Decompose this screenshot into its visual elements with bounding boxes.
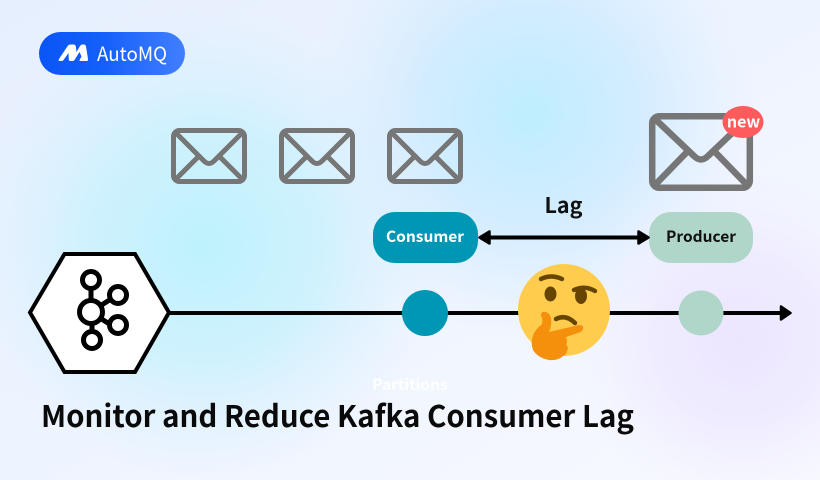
title: Monitor and Reduce Kafka Consumer Lag xyxy=(41,392,634,436)
consumer box xyxy=(373,212,478,263)
icon: thinking face emoji xyxy=(518,264,610,360)
icon: Kafka logo xyxy=(80,272,126,348)
arrow: lag between consumer and producer xyxy=(480,232,648,244)
producer box: Producer xyxy=(666,225,736,247)
icon: envelope 2 xyxy=(282,130,352,182)
icon: envelope 1 xyxy=(174,130,244,182)
consumer box: Consumer xyxy=(386,225,464,247)
logo: AutoMQ badge xyxy=(39,32,185,75)
marker: consumer offset xyxy=(402,290,448,336)
arrow: partition timeline xyxy=(168,306,790,320)
new badge: new xyxy=(727,108,760,132)
icon: envelope 3 xyxy=(390,130,460,182)
icon: new message envelope xyxy=(652,106,764,188)
label: Lag: Lag xyxy=(545,189,583,220)
logo: AutoMQ badge: AutoMQ xyxy=(97,38,167,67)
marker: producer offset xyxy=(678,290,724,336)
icon: Kafka hexagon xyxy=(30,254,169,372)
label: Partitions: Partitions xyxy=(372,373,448,395)
producer box xyxy=(649,212,753,263)
